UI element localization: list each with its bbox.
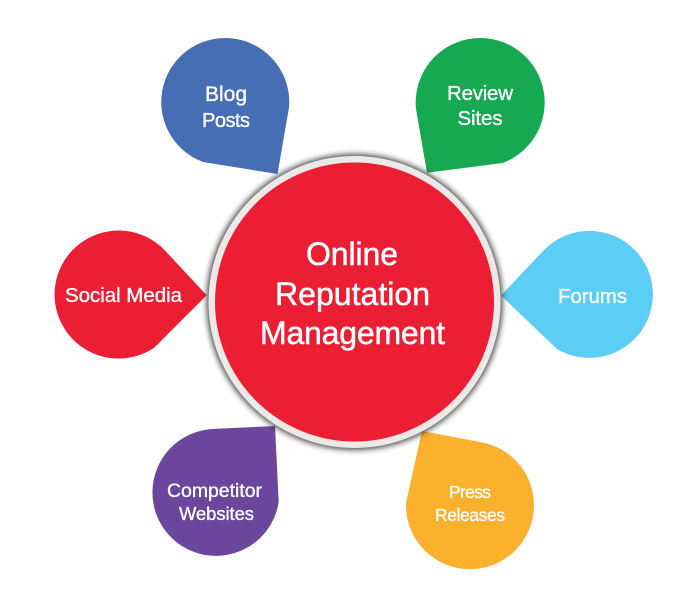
central title: Reputation bbox=[275, 276, 430, 312]
drop: Forums bbox=[501, 231, 653, 358]
central title: Management bbox=[260, 315, 445, 351]
drop: Forums: Forums bbox=[558, 285, 627, 308]
drop: Press Releases: Releases bbox=[435, 505, 505, 525]
drop: Review Sites: Sites bbox=[458, 107, 502, 130]
drop: Press Releases: Press bbox=[449, 482, 491, 502]
drop: Blog Posts: Blog bbox=[205, 83, 247, 106]
drop: Social Media bbox=[55, 231, 207, 359]
drop: Review Sites: Review bbox=[447, 82, 513, 105]
central circle bbox=[206, 154, 502, 450]
drop: Competitor Websites: Websites bbox=[179, 503, 254, 524]
central title bbox=[260, 236, 445, 351]
central title: Online bbox=[306, 236, 398, 272]
drop: Competitor Websites: Competitor bbox=[167, 480, 263, 502]
drop: Social Media: Social Media bbox=[65, 284, 183, 307]
drop: Blog Posts bbox=[161, 38, 289, 174]
drop: Blog Posts: Posts bbox=[202, 110, 250, 132]
drop: Competitor Websites bbox=[152, 426, 279, 556]
drop: Review Sites bbox=[416, 38, 545, 173]
drop: Press Releases bbox=[406, 431, 534, 569]
